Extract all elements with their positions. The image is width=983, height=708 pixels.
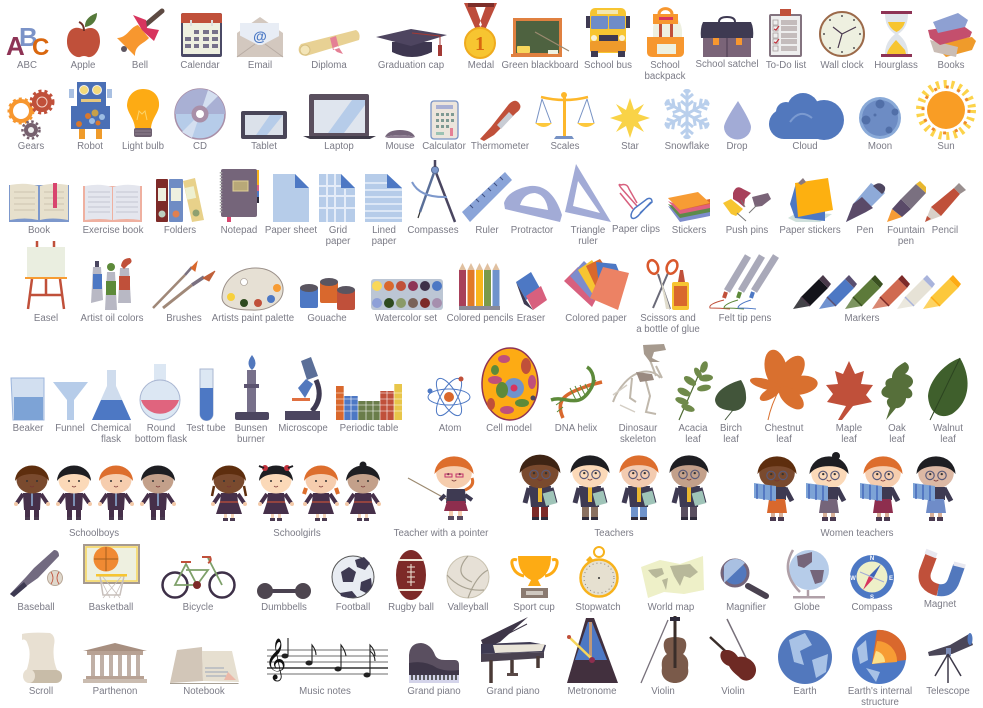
icon: scissors and a bottle of glue: Scissors and xyxy=(640,313,696,324)
icon: stickers xyxy=(668,192,710,236)
icon: school backpack xyxy=(645,9,686,82)
icon: push pins: Push pins xyxy=(726,225,768,236)
icon: tablet xyxy=(241,111,287,152)
icon: calendar xyxy=(180,13,222,71)
icon: maple leaf xyxy=(826,361,873,445)
group: women teachers xyxy=(754,452,956,539)
icon: wall clock: Wall clock xyxy=(820,60,864,71)
icon: round bottom flask xyxy=(135,364,187,445)
group: women teachers: Women teachers xyxy=(820,528,894,539)
text: ABC: C xyxy=(32,34,49,61)
icon: ruler xyxy=(462,172,512,236)
icon: sport cup xyxy=(512,556,557,613)
icon: periodic table: Periodic table xyxy=(340,423,398,434)
icon: bunsen burner xyxy=(235,355,269,445)
icon: globe xyxy=(788,550,829,613)
icon: world map: World map xyxy=(648,602,694,613)
icon: round bottom flask: bottom flask xyxy=(135,434,187,445)
icon: felt tip pens xyxy=(710,256,776,324)
icon: walnut leaf: leaf xyxy=(940,434,956,445)
icon: triangle ruler xyxy=(565,164,611,247)
icon: earth's internal structure: Earth's internal xyxy=(848,686,912,697)
icon: scales: Scales xyxy=(550,141,580,152)
icon: watercolor set: Watercolor set xyxy=(375,313,437,324)
icon: cell model xyxy=(482,348,538,434)
icon: sun xyxy=(920,84,972,152)
icon: stickers: Stickers xyxy=(672,225,706,236)
icon: tablet: Tablet xyxy=(251,141,277,152)
icon: artists paint palette xyxy=(212,268,294,324)
icon: scroll xyxy=(22,633,62,697)
icon: to-do list: To-Do list xyxy=(766,60,806,71)
icon: felt tip pens: Felt tip pens xyxy=(719,313,772,324)
icon: chestnut leaf: leaf xyxy=(776,434,792,445)
icon: magnifier xyxy=(722,559,767,613)
icon: violin bow variant: Violin xyxy=(721,686,745,697)
group: teachers: Teachers xyxy=(594,528,634,539)
icon: compass: N xyxy=(870,556,874,562)
text: ABC xyxy=(6,22,49,71)
icon: triangle ruler: ruler xyxy=(578,236,598,247)
icon: mouse xyxy=(385,130,415,152)
icon: lined paper: paper xyxy=(372,236,397,247)
icon: birch leaf: leaf xyxy=(723,434,739,445)
icon: gears: Gears xyxy=(18,141,44,152)
icon: metronome xyxy=(567,618,618,697)
icon: music notes xyxy=(265,638,388,697)
icon: snowflake: Snowflake xyxy=(665,141,709,152)
icon: walnut leaf xyxy=(928,358,968,445)
icon: green blackboard: Green blackboard xyxy=(501,60,579,71)
icon: baseball xyxy=(10,550,62,613)
icon: grid paper: paper xyxy=(326,236,351,247)
icon: ruler: Ruler xyxy=(475,225,499,236)
icon: test tube xyxy=(186,369,226,434)
icon: sport cup: Sport cup xyxy=(513,602,555,613)
icon: violin bow variant xyxy=(710,619,756,697)
icon: cell model: Cell model xyxy=(486,423,532,434)
icon: school satchel xyxy=(695,17,759,70)
icon: protractor xyxy=(504,186,562,236)
icon: protractor: Protractor xyxy=(511,225,554,236)
icon: eraser xyxy=(516,272,547,324)
icon: cloud xyxy=(769,93,844,152)
group: schoolboys: Schoolboys xyxy=(69,528,119,539)
icon: dinosaur skeleton: Dinosaur xyxy=(619,423,658,434)
icon: telescope: Telescope xyxy=(926,686,970,697)
icon: star xyxy=(610,98,650,152)
icon: earth xyxy=(778,630,832,697)
icon: basketball: Basketball xyxy=(89,602,133,613)
icon: dumbbells xyxy=(257,583,311,613)
icon: apple: Apple xyxy=(71,60,95,71)
icon: medal: 1 xyxy=(475,33,485,55)
icon: beaker xyxy=(11,378,44,434)
icon: bicycle xyxy=(162,557,234,613)
icon: stopwatch: Stopwatch xyxy=(575,602,621,613)
icon: compass: E xyxy=(889,576,893,582)
icon: colored paper xyxy=(564,259,629,324)
icon: rugby ball xyxy=(388,550,434,613)
icon: lined paper xyxy=(365,174,402,247)
figure: teacher with a pointer xyxy=(394,456,489,539)
icon: light bulb xyxy=(122,89,164,152)
figure: teacher with a pointer: Teacher with a pointer xyxy=(394,528,489,539)
icon: pen: Pen xyxy=(856,225,874,236)
icon: chestnut leaf xyxy=(749,348,819,445)
icon: notepad: Notepad xyxy=(221,225,257,236)
text: ABC: A xyxy=(6,31,25,61)
icon: exercise book xyxy=(83,185,144,236)
icon: compass: W xyxy=(850,576,856,582)
icon: compass: S xyxy=(870,595,874,601)
icon: maple leaf: leaf xyxy=(841,434,857,445)
icon: funnel xyxy=(53,382,88,434)
icon: football xyxy=(332,556,374,613)
icon: maple leaf: Maple xyxy=(836,423,862,434)
icon: fountain pen: Fountain xyxy=(887,225,925,236)
icon: bicycle: Bicycle xyxy=(183,602,213,613)
icon: snowflake xyxy=(662,89,712,152)
icon: colored paper: Colored paper xyxy=(565,313,627,324)
icon: push pins xyxy=(723,187,771,236)
icon: compass xyxy=(850,555,894,613)
icon: book xyxy=(9,183,69,236)
icon: dinosaur skeleton xyxy=(613,344,666,445)
icon: parthenon: Parthenon xyxy=(93,686,137,697)
icon: scroll: Scroll xyxy=(29,686,53,697)
icon: laptop xyxy=(303,94,376,152)
icon: chemical flask: flask xyxy=(101,434,121,445)
icon: funnel: Funnel xyxy=(55,423,85,434)
icon: school bus xyxy=(584,8,632,71)
icon: brushes xyxy=(153,262,215,324)
icon: diploma: Diploma xyxy=(311,60,347,71)
icon: acacia leaf: leaf xyxy=(685,434,701,445)
icon: colored pencils xyxy=(447,263,514,324)
group: schoolgirls: Schoolgirls xyxy=(273,528,321,539)
icon: graduation cap xyxy=(376,29,447,71)
icon: markers xyxy=(793,275,961,324)
icon: calculator xyxy=(422,101,467,152)
icon: eraser: Eraser xyxy=(517,313,546,324)
icon: cloud: Cloud xyxy=(792,141,818,152)
icon: apple xyxy=(67,13,100,71)
icon: oak leaf xyxy=(881,362,913,445)
icon: world map xyxy=(641,556,704,613)
icon: compass: Compass xyxy=(852,602,893,613)
icon: easel: Easel xyxy=(34,313,58,324)
icon: fountain pen xyxy=(887,181,926,247)
icon: folders xyxy=(156,178,204,236)
icon: valleyball: Valleyball xyxy=(448,602,488,613)
icon: earth's internal structure xyxy=(848,630,912,708)
icon: atom: Atom xyxy=(439,423,461,434)
icon: brushes: Brushes xyxy=(166,313,202,324)
icon: wall clock xyxy=(820,12,864,71)
icon: folders: Folders xyxy=(164,225,196,236)
icon: oak leaf: Oak xyxy=(888,423,906,434)
icon: oak leaf: leaf xyxy=(889,434,905,445)
icon: parthenon xyxy=(83,643,147,697)
icon: paper clips: Paper clips xyxy=(612,224,660,235)
icon: paper stickers xyxy=(779,178,841,236)
icon: scissors and a bottle of glue xyxy=(636,259,700,335)
icon: violin: Violin xyxy=(651,686,675,697)
icon: acacia leaf xyxy=(674,360,713,445)
icon: test tube: Test tube xyxy=(186,423,226,434)
icon: markers: Markers xyxy=(844,313,880,324)
icon: green blackboard xyxy=(501,18,579,71)
icon: basketball xyxy=(84,545,139,613)
icon: music notes: Music notes xyxy=(299,686,351,697)
icon: football: Football xyxy=(336,602,370,613)
icon: light bulb: Light bulb xyxy=(122,141,164,152)
icon: robot: Robot xyxy=(77,141,103,152)
icon: chestnut leaf: Chestnut xyxy=(765,423,804,434)
icon: books: Books xyxy=(938,60,965,71)
icon: books xyxy=(928,13,976,71)
icon: magnet xyxy=(924,551,960,610)
icon: stopwatch xyxy=(575,547,621,613)
icon: chemical flask xyxy=(91,370,131,445)
icon: gouache: Gouache xyxy=(307,313,347,324)
icon: drop: Drop xyxy=(726,141,748,152)
icon: triangle ruler: Triangle xyxy=(571,225,605,236)
icon: magnifier: Magnifier xyxy=(726,602,767,613)
icon: paper clips xyxy=(612,184,660,235)
icon: pencil xyxy=(925,183,966,236)
icon: microscope: Microscope xyxy=(278,423,328,434)
icon: bell xyxy=(117,11,162,71)
icon: bunsen burner: Bunsen xyxy=(235,423,267,434)
icon: email: @ xyxy=(253,28,267,44)
icon: sun: Sun xyxy=(937,141,955,152)
icon: periodic table xyxy=(336,384,402,434)
icon: earth: Earth xyxy=(793,686,817,697)
icon: fountain pen: pen xyxy=(898,236,914,247)
icon: exercise book: Exercise book xyxy=(83,225,144,236)
icon: school satchel: School satchel xyxy=(695,59,759,70)
icon: magnet: Magnet xyxy=(924,599,956,610)
icon: school bus: School bus xyxy=(584,60,632,71)
icon: bunsen burner: burner xyxy=(237,434,266,445)
icon: grand piano: Grand piano xyxy=(486,686,540,697)
icon: baseball: Baseball xyxy=(17,602,55,613)
icon: drop xyxy=(724,101,751,152)
icon: dinosaur skeleton: skeleton xyxy=(620,434,656,445)
icon: pencil: Pencil xyxy=(932,225,958,236)
icon: school backpack: School xyxy=(650,60,680,71)
group: schoolgirls xyxy=(211,462,381,539)
icon: birch leaf: Birch xyxy=(720,423,742,434)
icon: hourglass xyxy=(874,11,918,71)
icon: diploma xyxy=(299,30,360,71)
icon: birch leaf xyxy=(715,380,746,445)
icon: email xyxy=(237,17,283,71)
icon: calendar: Calendar xyxy=(180,60,220,71)
icon: bell: Bell xyxy=(132,60,148,71)
group: teachers xyxy=(520,455,709,539)
icon: paper stickers: Paper stickers xyxy=(779,225,841,236)
icon: paper sheet xyxy=(265,174,317,236)
icon: email: Email xyxy=(248,60,272,71)
icon: artists paint palette: Artists paint palette xyxy=(212,313,294,324)
icon: grand piano small xyxy=(407,643,461,697)
icon: scales xyxy=(535,92,595,152)
icon: easel xyxy=(25,241,67,324)
icon: grand piano xyxy=(481,617,546,697)
text: ABC: ABC xyxy=(17,60,37,71)
icon: mouse: Mouse xyxy=(385,141,415,152)
icon: CD xyxy=(175,89,225,152)
icon: gears xyxy=(9,91,53,152)
icon: hourglass: Hourglass xyxy=(874,60,918,71)
icon: pen xyxy=(846,183,885,236)
icon: thermometer: Thermometer xyxy=(471,141,530,152)
icon: music notes: 𝄞 xyxy=(265,638,286,681)
icon: calculator: Calculator xyxy=(422,141,467,152)
icon: notebook: Notebook xyxy=(183,686,225,697)
icon: rugby ball: Rugby ball xyxy=(388,602,434,613)
icon: chemical flask: Chemical xyxy=(91,423,131,434)
icon: acacia leaf: Acacia xyxy=(678,423,708,434)
icon: robot xyxy=(69,82,112,152)
icon: colored pencils: Colored pencils xyxy=(447,313,514,324)
icon: microscope xyxy=(278,357,328,434)
icon: moon: Moon xyxy=(868,141,892,152)
icon: globe: Globe xyxy=(794,602,820,613)
icon: medal xyxy=(464,3,497,71)
icon: artist oil colors xyxy=(81,258,144,324)
icon: watercolor set xyxy=(371,279,443,324)
icon: earth's internal structure: structure xyxy=(861,697,899,708)
icon: DNA helix: DNA helix xyxy=(555,423,597,434)
text: ABC: B xyxy=(19,22,38,52)
icon: notebook xyxy=(170,647,239,697)
icon: telescope xyxy=(926,633,973,697)
icon: laptop: Laptop xyxy=(324,141,354,152)
icon: CD: CD xyxy=(193,141,207,152)
icon: school backpack: backpack xyxy=(645,71,686,82)
icon: thermometer xyxy=(471,101,530,152)
icon: dumbbells: Dumbbells xyxy=(261,602,307,613)
icon: moon xyxy=(859,97,901,152)
icon: DNA helix xyxy=(551,367,602,434)
icon: grid paper: Grid xyxy=(329,225,347,236)
icon: paper sheet: Paper sheet xyxy=(265,225,317,236)
icon: lined paper: Lined xyxy=(372,225,396,236)
icon: star: Star xyxy=(621,141,640,152)
icon: notepad xyxy=(221,169,259,236)
icon: artist oil colors: Artist oil colors xyxy=(81,313,144,324)
icon: walnut leaf: Walnut xyxy=(933,423,963,434)
icon: valleyball xyxy=(447,556,489,613)
icon: grand piano small: Grand piano xyxy=(407,686,461,697)
icon: atom xyxy=(428,375,470,434)
icon: compasses xyxy=(407,160,459,236)
icon: gouache xyxy=(300,278,355,324)
icon: grid paper xyxy=(319,174,355,247)
icon: round bottom flask: Round xyxy=(147,423,175,434)
icon: beaker: Beaker xyxy=(13,423,44,434)
icon: book: Book xyxy=(28,225,50,236)
icon: medal: Medal xyxy=(468,60,494,71)
icon: metronome: Metronome xyxy=(568,686,616,697)
icon: to-do list xyxy=(766,9,806,71)
icon: graduation cap: Graduation cap xyxy=(378,60,444,71)
icon: scissors and a bottle of glue: a bottle of glue xyxy=(636,324,700,335)
icon: compasses: Compasses xyxy=(407,225,459,236)
group: schoolboys xyxy=(14,466,176,539)
icon: violin xyxy=(641,616,688,697)
